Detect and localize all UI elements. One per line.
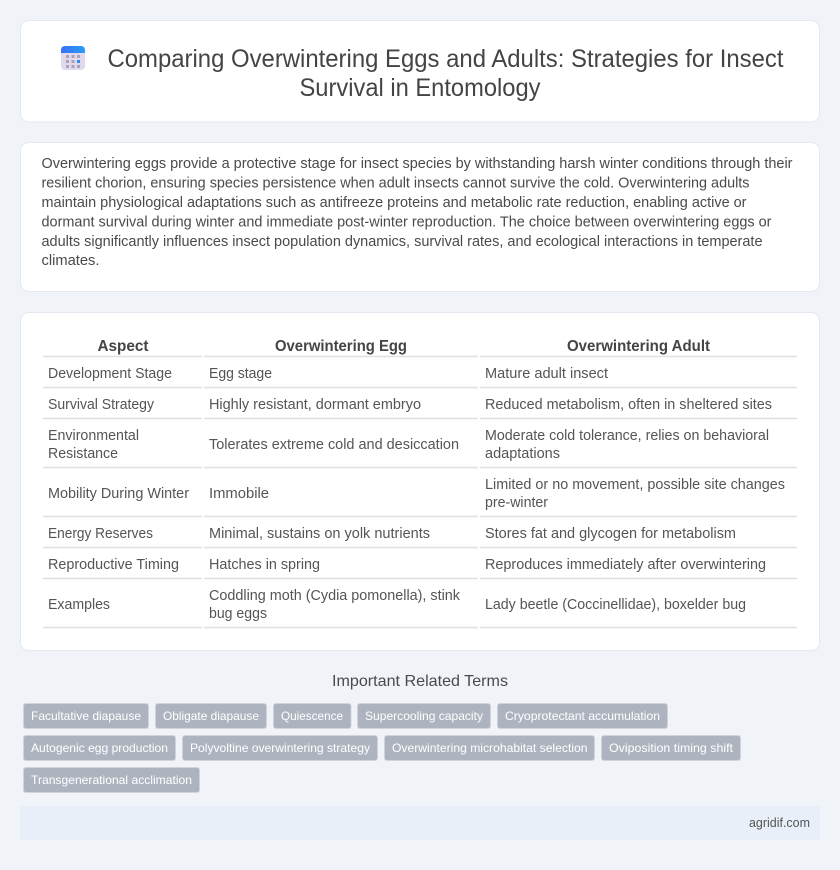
row: examples: Lady beetle (Coccinellidae), boxelder bug [485,597,746,613]
row: environmental resistance: Tolerates extreme cold and desiccation [209,437,459,453]
tag: overwintering microhabitat selection: Overwintering microhabitat selection [392,741,588,755]
table header row: Overwintering Adult [567,338,711,355]
row: examples [48,588,746,622]
panel: summary paragraph: dormant survival during winter and immediate post-winter reproduction. The choice between overwintering eggs or [42,214,772,230]
row: environmental resistance: adaptations [485,446,560,462]
row: survival strategy: Survival Strategy [48,397,155,413]
tag: oviposition timing shift [602,736,740,760]
row: examples: Coddling moth (Cydia pomonella), stink [209,588,461,604]
tag: obligate diapause [156,704,266,728]
tag: polyvoltine overwintering strategy: Polyvoltine overwintering strategy [190,741,370,755]
row: environmental resistance [48,428,769,462]
tag: quiescence: Quiescence [281,709,343,723]
row: energy reserves: Stores fat and glycogen for metabolism [485,526,736,542]
footer: agridif.com [749,816,810,830]
row: reproductive timing [48,557,766,573]
panel: comparison table [20,312,820,650]
tag: supercooling capacity [358,704,490,728]
row: mobility during winter: Mobility During Winter [48,486,189,502]
panel: summary paragraph: resilient chorion, ensuring species persistence when adult insects cannot survive the cold. Overwintering adults [42,176,750,192]
tag: cryoprotectant accumulation: Cryoprotectant accumulation [505,709,660,723]
row: environmental resistance: Moderate cold tolerance, relies on behavioral [485,428,769,444]
panel: summary paragraph [20,142,820,292]
row: energy reserves [48,526,736,542]
footer [20,806,820,840]
tag: oviposition timing shift: Oviposition timing shift [609,741,734,755]
row: energy reserves: Energy Reserves [48,526,153,542]
tag: transgenerational acclimation: Transgenerational acclimation [31,773,192,787]
title: Survival in Entomology [300,74,541,102]
panel: summary paragraph: Overwintering eggs provide a protective stage for insect species by withstanding harsh winter conditions through their [42,156,793,172]
tag: facultative diapause [24,704,148,728]
title: Comparing Overwintering Eggs and Adults: Strategies for Insect [108,45,784,73]
row: mobility during winter [48,477,785,511]
panel: header [20,20,820,122]
tag: quiescence [274,704,351,728]
tag: facultative diapause: Facultative diapause [31,709,141,723]
title [108,45,784,102]
panel: summary paragraph: adults significantly influences insect population dynamics, survival rates, and ecological interactions in temperate [42,234,763,250]
panel: summary paragraph: climates. [42,253,100,269]
tag: transgenerational acclimation [24,768,200,792]
icon: calendar [61,46,85,70]
row: mobility during winter: Limited or no movement, possible site changes [485,477,785,493]
heading: important related terms: Important Related Terms [332,673,508,690]
panel: related term tags [24,704,740,792]
row: reproductive timing: Reproduces immediately after overwintering [485,557,766,573]
row: development stage [48,366,608,382]
row: development stage: Development Stage [48,366,172,382]
row: survival strategy [48,397,772,413]
row: survival strategy: Highly resistant, dormant embryo [209,397,421,413]
row: reproductive timing: Reproductive Timing [48,557,179,573]
row: energy reserves: Minimal, sustains on yolk nutrients [209,526,430,542]
row: development stage: Egg stage [209,366,272,382]
tag: overwintering microhabitat selection [384,736,594,760]
row: environmental resistance: Environmental [48,428,139,444]
table header row: Overwintering Egg [275,338,407,355]
row: mobility during winter: Immobile [209,486,269,502]
tag: autogenic egg production: Autogenic egg production [31,741,168,755]
row: mobility during winter: pre-winter [485,495,548,511]
row: examples: bug eggs [209,606,267,622]
tag: cryoprotectant accumulation [498,704,668,728]
tag: obligate diapause: Obligate diapause [163,709,259,723]
panel: summary paragraph: maintain physiological adaptations such as antifreeze proteins and metabolic rate reduction, enabling active or [42,195,747,211]
tag: autogenic egg production [24,736,176,760]
row: examples: Examples [48,597,110,613]
tag: polyvoltine overwintering strategy [182,736,378,760]
row: reproductive timing: Hatches in spring [209,557,320,573]
tag: supercooling capacity: Supercooling capacity [365,709,483,723]
row: environmental resistance: Resistance [48,446,118,462]
table header row: Aspect [98,338,149,355]
table header row [98,338,711,355]
row: survival strategy: Reduced metabolism, often in sheltered sites [485,397,772,413]
row: development stage: Mature adult insect [485,366,608,382]
